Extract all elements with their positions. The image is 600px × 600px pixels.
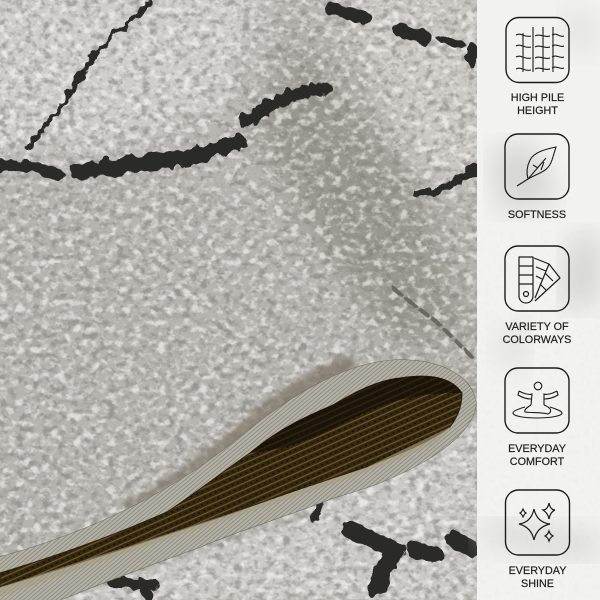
label: high pile height: HEIGHT <box>517 105 558 117</box>
woven backing <box>0 376 462 587</box>
icon: pile fibres <box>506 18 569 82</box>
label: everyday comfort: COMFORT <box>510 456 565 468</box>
feature: softness <box>505 134 569 221</box>
label: variety of colorways: COLORWAYS <box>503 334 571 346</box>
panel: feature column background <box>477 0 600 600</box>
feature: everyday shine <box>506 490 570 590</box>
icon: colour fan deck <box>505 246 569 311</box>
label: variety of colorways: VARIETY OF <box>505 321 569 333</box>
rug pile texture <box>0 0 480 600</box>
icon: sparkles <box>506 490 570 555</box>
rug pattern: dark diamond lines <box>0 2 476 600</box>
brown shadow beneath pile <box>120 355 360 510</box>
label: everyday shine: SHINE <box>521 578 554 590</box>
icon: meditating figure <box>505 368 569 433</box>
label: everyday shine: EVERYDAY <box>509 565 566 577</box>
lower lip highlight <box>0 427 450 597</box>
feature: variety of colorways <box>503 246 571 346</box>
feature: high pile height <box>506 18 569 117</box>
binding outer shape <box>0 360 476 600</box>
feature: everyday comfort <box>505 368 569 468</box>
label: softness: SOFTNESS <box>508 209 566 221</box>
rug fold: folded edge and backing <box>0 355 476 600</box>
binding stitching <box>0 360 476 600</box>
icon: feather <box>505 134 569 199</box>
backing inner shadow <box>250 376 462 453</box>
label: everyday comfort: EVERYDAY <box>508 443 566 455</box>
label: high pile height: HIGH PILE <box>511 92 564 104</box>
